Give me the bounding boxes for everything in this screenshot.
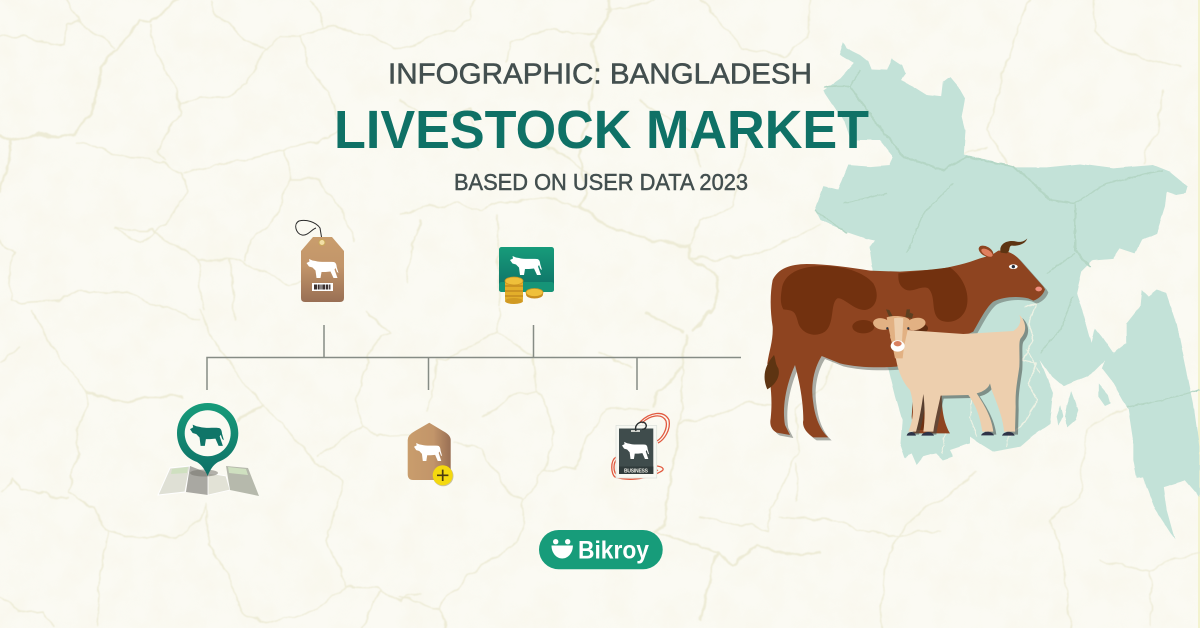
logo: Bikroy: Bikroy: [578, 536, 649, 564]
logo: Bikroy: [539, 530, 663, 569]
icon: price tag with cow: [296, 220, 344, 302]
title line 2: LIVESTOCK MARKET: [334, 100, 869, 160]
illustration: brown cow: [765, 238, 1048, 440]
cow nose: [1035, 287, 1042, 291]
cow horn: [1000, 238, 1027, 253]
cow tail: [765, 355, 779, 389]
goat hooves: [907, 432, 1015, 436]
icon: business badge with lanyard: BUSINESS: [624, 468, 649, 474]
subtitle: BASED ON USER DATA 2023: [454, 169, 748, 195]
goat ears: [872, 316, 927, 332]
goat head: [887, 316, 909, 358]
connector tree: [207, 325, 741, 390]
icon: banknote with cow and coins: [499, 247, 554, 304]
illustration: goat: [872, 309, 1028, 436]
map of Bangladesh: [815, 42, 1199, 540]
cow eye: [1009, 264, 1018, 269]
icon: map pin with cow: [158, 403, 259, 496]
icon: add listing tag: [408, 423, 454, 486]
icon: business badge with lanyard: [612, 413, 669, 479]
goat muzzle: [891, 340, 905, 352]
goat horns: [886, 309, 913, 319]
cow spots: [781, 266, 968, 335]
cow ear: [977, 243, 995, 259]
goat eyes: [886, 327, 909, 329]
title line 1: INFOGRAPHIC: BANGLADESH: [388, 58, 812, 90]
